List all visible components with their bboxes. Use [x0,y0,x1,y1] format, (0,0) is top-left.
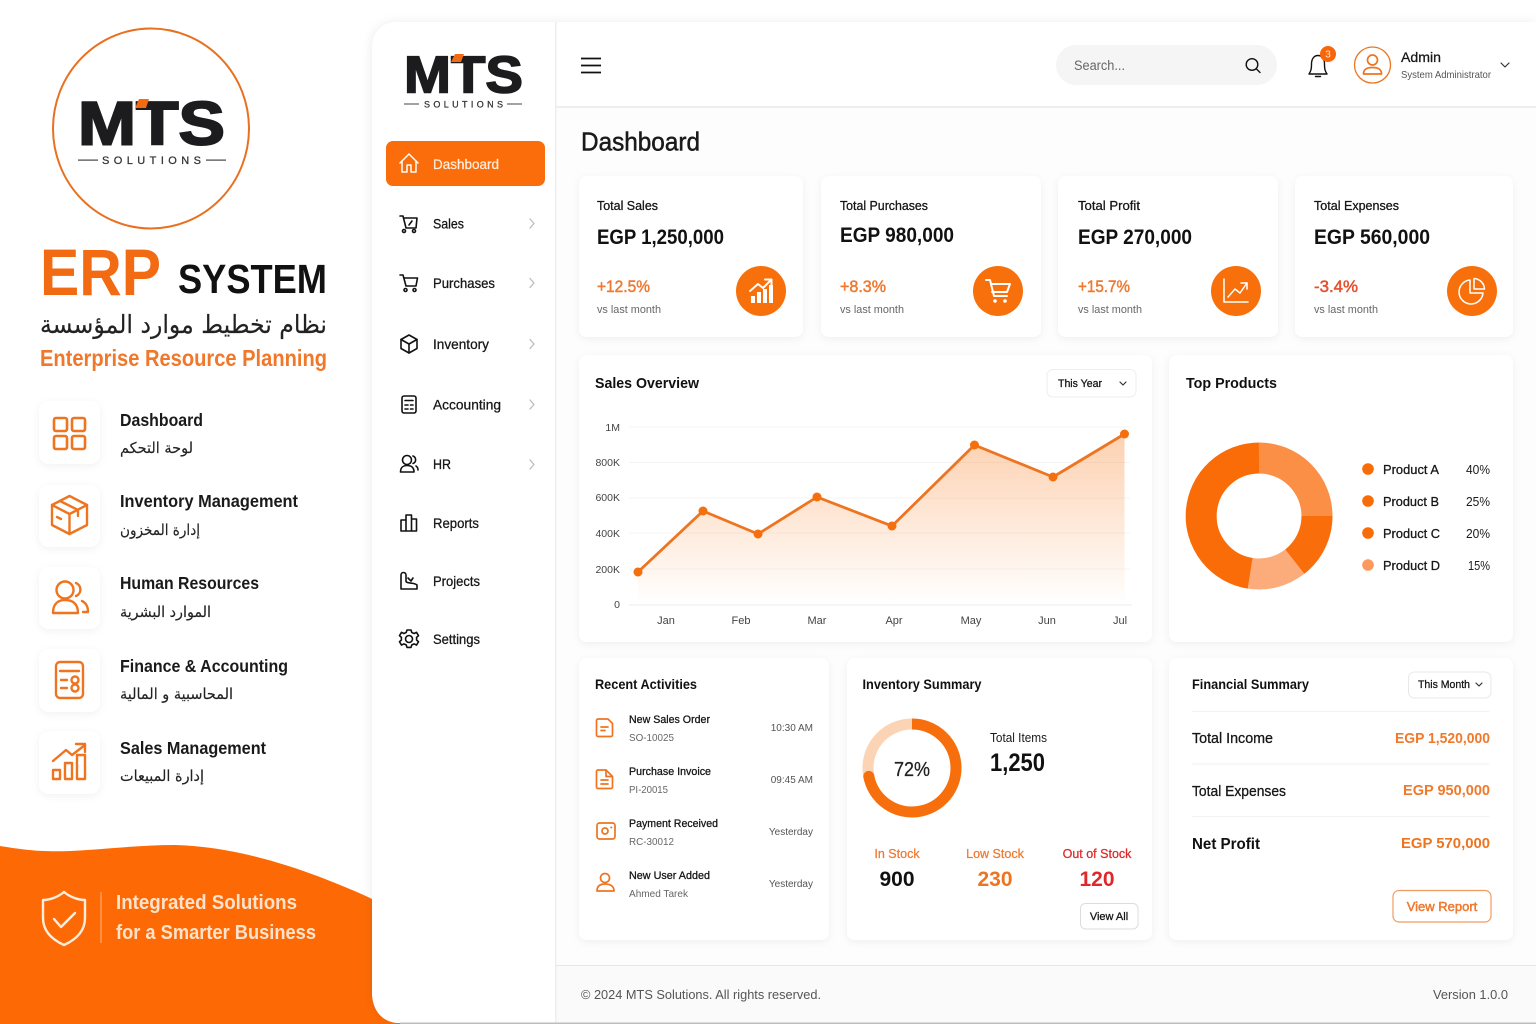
row: total income: EGP 1,520,000 [1395,730,1490,747]
dropdown: this year: This Year [1058,378,1102,390]
total items: 1,250 [990,749,1045,777]
icon: cart badge [973,266,1023,316]
row: total income [1192,730,1490,747]
kpi: total expenses: EGP 560,000 [1314,226,1430,249]
page heading: Dashboard [581,126,700,156]
stat: low stock [966,847,1025,891]
activity: payment received: Yesterday [769,827,813,838]
icon: box [52,496,87,534]
banner tagline: for a Smarter Business [116,921,316,944]
subtitle: Enterprise Resource Planning [40,345,327,371]
activity: purchase invoice [596,766,813,796]
icon: pie badge [1447,266,1497,316]
line chart: May [961,615,982,627]
button: view all [1080,904,1138,929]
legend: Product C [1383,526,1440,541]
progress ring: 72% [894,759,930,781]
activity: new user added [597,870,813,900]
row: total expenses: EGP 950,000 [1403,782,1490,799]
feature: human resources: الموارد البشرية [120,603,211,621]
line chart: 0 [614,599,620,611]
activity: purchase invoice: Purchase Invoice [629,766,711,778]
arabic title: نظام تخطيط موارد المؤسسة [40,310,327,339]
nav: inventory [401,335,534,353]
brand logo circle: MTS [78,90,225,158]
notification bell [1309,46,1336,76]
kpi: total profit: Total Profit [1078,198,1140,213]
nav: purchases: Purchases [433,275,495,291]
nav: sales [400,216,534,232]
nav: sales: Sales [433,216,464,232]
icon: grid [54,418,85,449]
panel: recent activities [579,658,829,940]
kpi: total sales: Total Sales [597,198,658,213]
total items [990,731,1047,777]
icon: people [53,582,88,613]
legend: 25% [1466,494,1490,509]
footer: Version 1.0.0 [1433,987,1508,1002]
nav: accounting: Accounting [433,396,501,412]
row: net profit: Net Profit [1192,836,1260,853]
sidebar logo: SOLUTIONS [424,100,503,110]
legend: Product D [1383,558,1440,573]
kpi: total purchases: Total Purchases [840,198,928,213]
line chart: 1M [605,422,620,434]
kpi: total sales [579,176,803,337]
line chart: Jun [1038,615,1056,627]
footer [400,965,1536,1024]
feature: sales: Sales Management [120,738,266,758]
banner tagline [116,891,316,944]
dashboard window [372,22,1536,1023]
kpi: total expenses: vs last month [1314,304,1378,316]
kpi: total profit: vs last month [1078,304,1142,316]
activity: purchase invoice: PI-20015 [629,784,668,796]
feature: sales: إدارة المبيعات [120,767,204,785]
feature: finance: Finance & Accounting [120,656,288,676]
panel: inventory summary: Inventory Summary [862,676,982,692]
nav: projects: Projects [433,573,480,589]
activity: payment received [597,818,813,848]
stat: low stock: Low Stock [966,847,1025,861]
button: view report [1393,890,1491,922]
nav: hr: HR [433,456,451,472]
kpi: total profit: EGP 270,000 [1078,226,1192,249]
stat: out of stock: 120 [1079,868,1115,891]
activity: payment received: RC-30012 [629,836,674,848]
panel: inventory summary [847,658,1152,940]
nav: projects [401,572,480,589]
banner tagline: Integrated Solutions [116,891,297,914]
nav: reports: Reports [433,515,479,531]
line chart: Apr [885,615,903,627]
total items: Total Items [990,731,1047,745]
feature: human resources [39,567,259,629]
kpi: total sales: +12.5% [597,278,650,296]
kpi: total profit: +15.7% [1078,278,1130,296]
footer: © 2024 MTS Solutions. All rights reserved. [581,987,821,1002]
nav: purchases [400,275,534,292]
icon: sales chart badge [736,266,786,316]
feature: inventory: Inventory Management [120,491,298,511]
row: net profit: EGP 570,000 [1401,835,1490,852]
line chart: 600K [595,492,620,504]
donut chart [1201,458,1317,574]
sidebar [372,22,556,1023]
nav: reports [401,515,479,531]
line chart: 400K [595,528,620,540]
feature: sales [39,731,266,794]
kpi: total sales: EGP 1,250,000 [597,226,724,249]
title: ERP SYSTEM: SYSTEM [178,256,327,302]
kpi: total profit [1058,176,1278,337]
row: total income: Total Income [1192,731,1273,747]
kpi: total expenses: Total Expenses [1314,198,1399,213]
stat: in stock: In Stock [874,847,920,861]
feature: finance [39,649,288,712]
nav: settings: Settings [433,631,480,647]
button: view all: View All [1090,911,1128,923]
brand logo circle [53,28,249,228]
feature: dashboard: لوحة التحكم [120,439,193,457]
legend: 40% [1466,462,1490,477]
line chart: 800K [595,457,620,469]
icon: line chart badge [1211,266,1261,316]
stat: out of stock: Out of Stock [1063,847,1132,861]
progress ring [863,724,956,812]
row: total expenses [1192,782,1490,800]
brand logo circle: SOLUTIONS [102,155,201,167]
dropdown: this month: This Month [1418,679,1470,691]
nav: dashboard active [386,141,545,186]
row: total expenses: Total Expenses [1192,784,1286,800]
line chart: Feb [732,615,750,627]
panel: sales overview: Sales Overview [595,375,699,392]
admin profile: Admin [1401,49,1441,65]
icon: shield check [43,892,85,945]
activity: new user added: New User Added [629,870,710,882]
legend: Product A [1383,462,1439,477]
feature: dashboard [39,401,203,464]
nav: inventory: Inventory [433,336,489,352]
activity: new user added: Yesterday [769,879,813,890]
kpi: total expenses [1295,176,1513,337]
sidebar logo: MTS [404,46,523,104]
search box: Search... [1074,58,1125,73]
stat: out of stock [1063,847,1132,891]
stat: in stock: 900 [879,868,915,891]
orange wave banner [0,845,430,1024]
panel: sales overview [579,355,1152,642]
activity: new sales order: New Sales Order [629,714,710,726]
line chart: Mar [808,615,827,627]
legend [1362,462,1490,573]
kpi: total sales: vs last month [597,304,661,316]
icon: calculator [56,662,83,698]
line chart: 200K [595,564,620,576]
activity: new sales order: SO-10025 [629,732,674,744]
activity: new user added: Ahmed Tarek [629,888,689,900]
title: ERP SYSTEM [40,235,327,309]
line chart [595,422,1132,627]
admin profile: System Administrator [1401,69,1491,81]
dropdown: this month [1408,672,1491,698]
feature: dashboard: Dashboard [120,410,203,430]
nav: hr [400,456,534,472]
notification bell: 3 [1325,50,1331,60]
feature: human resources: Human Resources [120,573,259,593]
activity: payment received: Payment Received [629,818,718,830]
nav: settings [400,630,480,647]
icon: sales growth [53,744,85,779]
kpi: total purchases: EGP 980,000 [840,224,954,247]
panel: financial summary [1169,658,1513,940]
panel: top products: Top Products [1186,375,1277,392]
legend: 20% [1466,526,1490,541]
kpi: total purchases: +8.3% [840,278,886,296]
banner divider [100,892,102,943]
dropdown: this year [1047,370,1136,397]
feature: inventory: إدارة المخزون [120,521,200,539]
search box [1056,45,1277,85]
activity: new sales order: 10:30 AM [771,723,813,734]
panel: financial summary: Financial Summary [1192,676,1309,692]
line chart: Jan [657,615,675,627]
stat: in stock [874,847,920,891]
icon: hamburger menu [581,58,601,72]
panel: recent activities: Recent Activities [595,676,697,692]
row: net profit [1192,835,1490,853]
admin profile [1354,47,1509,83]
kpi: total expenses: -3.4% [1314,278,1358,296]
nav: dashboard active: Dashboard [433,156,499,172]
kpi: total purchases [821,176,1041,337]
button: view report: View Report [1407,899,1478,914]
panel: top products [1169,355,1513,642]
activity: new sales order [596,714,813,744]
legend: Product B [1383,494,1439,509]
feature: inventory [39,485,298,547]
nav: accounting [402,396,534,413]
stat: low stock: 230 [977,868,1013,891]
line chart: Jul [1113,615,1127,627]
legend: 15% [1468,558,1490,573]
activity: purchase invoice: 09:45 AM [771,775,813,786]
kpi: total purchases: vs last month [840,304,904,316]
title: ERP SYSTEM: ERP [40,235,161,309]
top header bar [556,22,1536,108]
feature: finance: المحاسبية و المالية [120,685,233,703]
